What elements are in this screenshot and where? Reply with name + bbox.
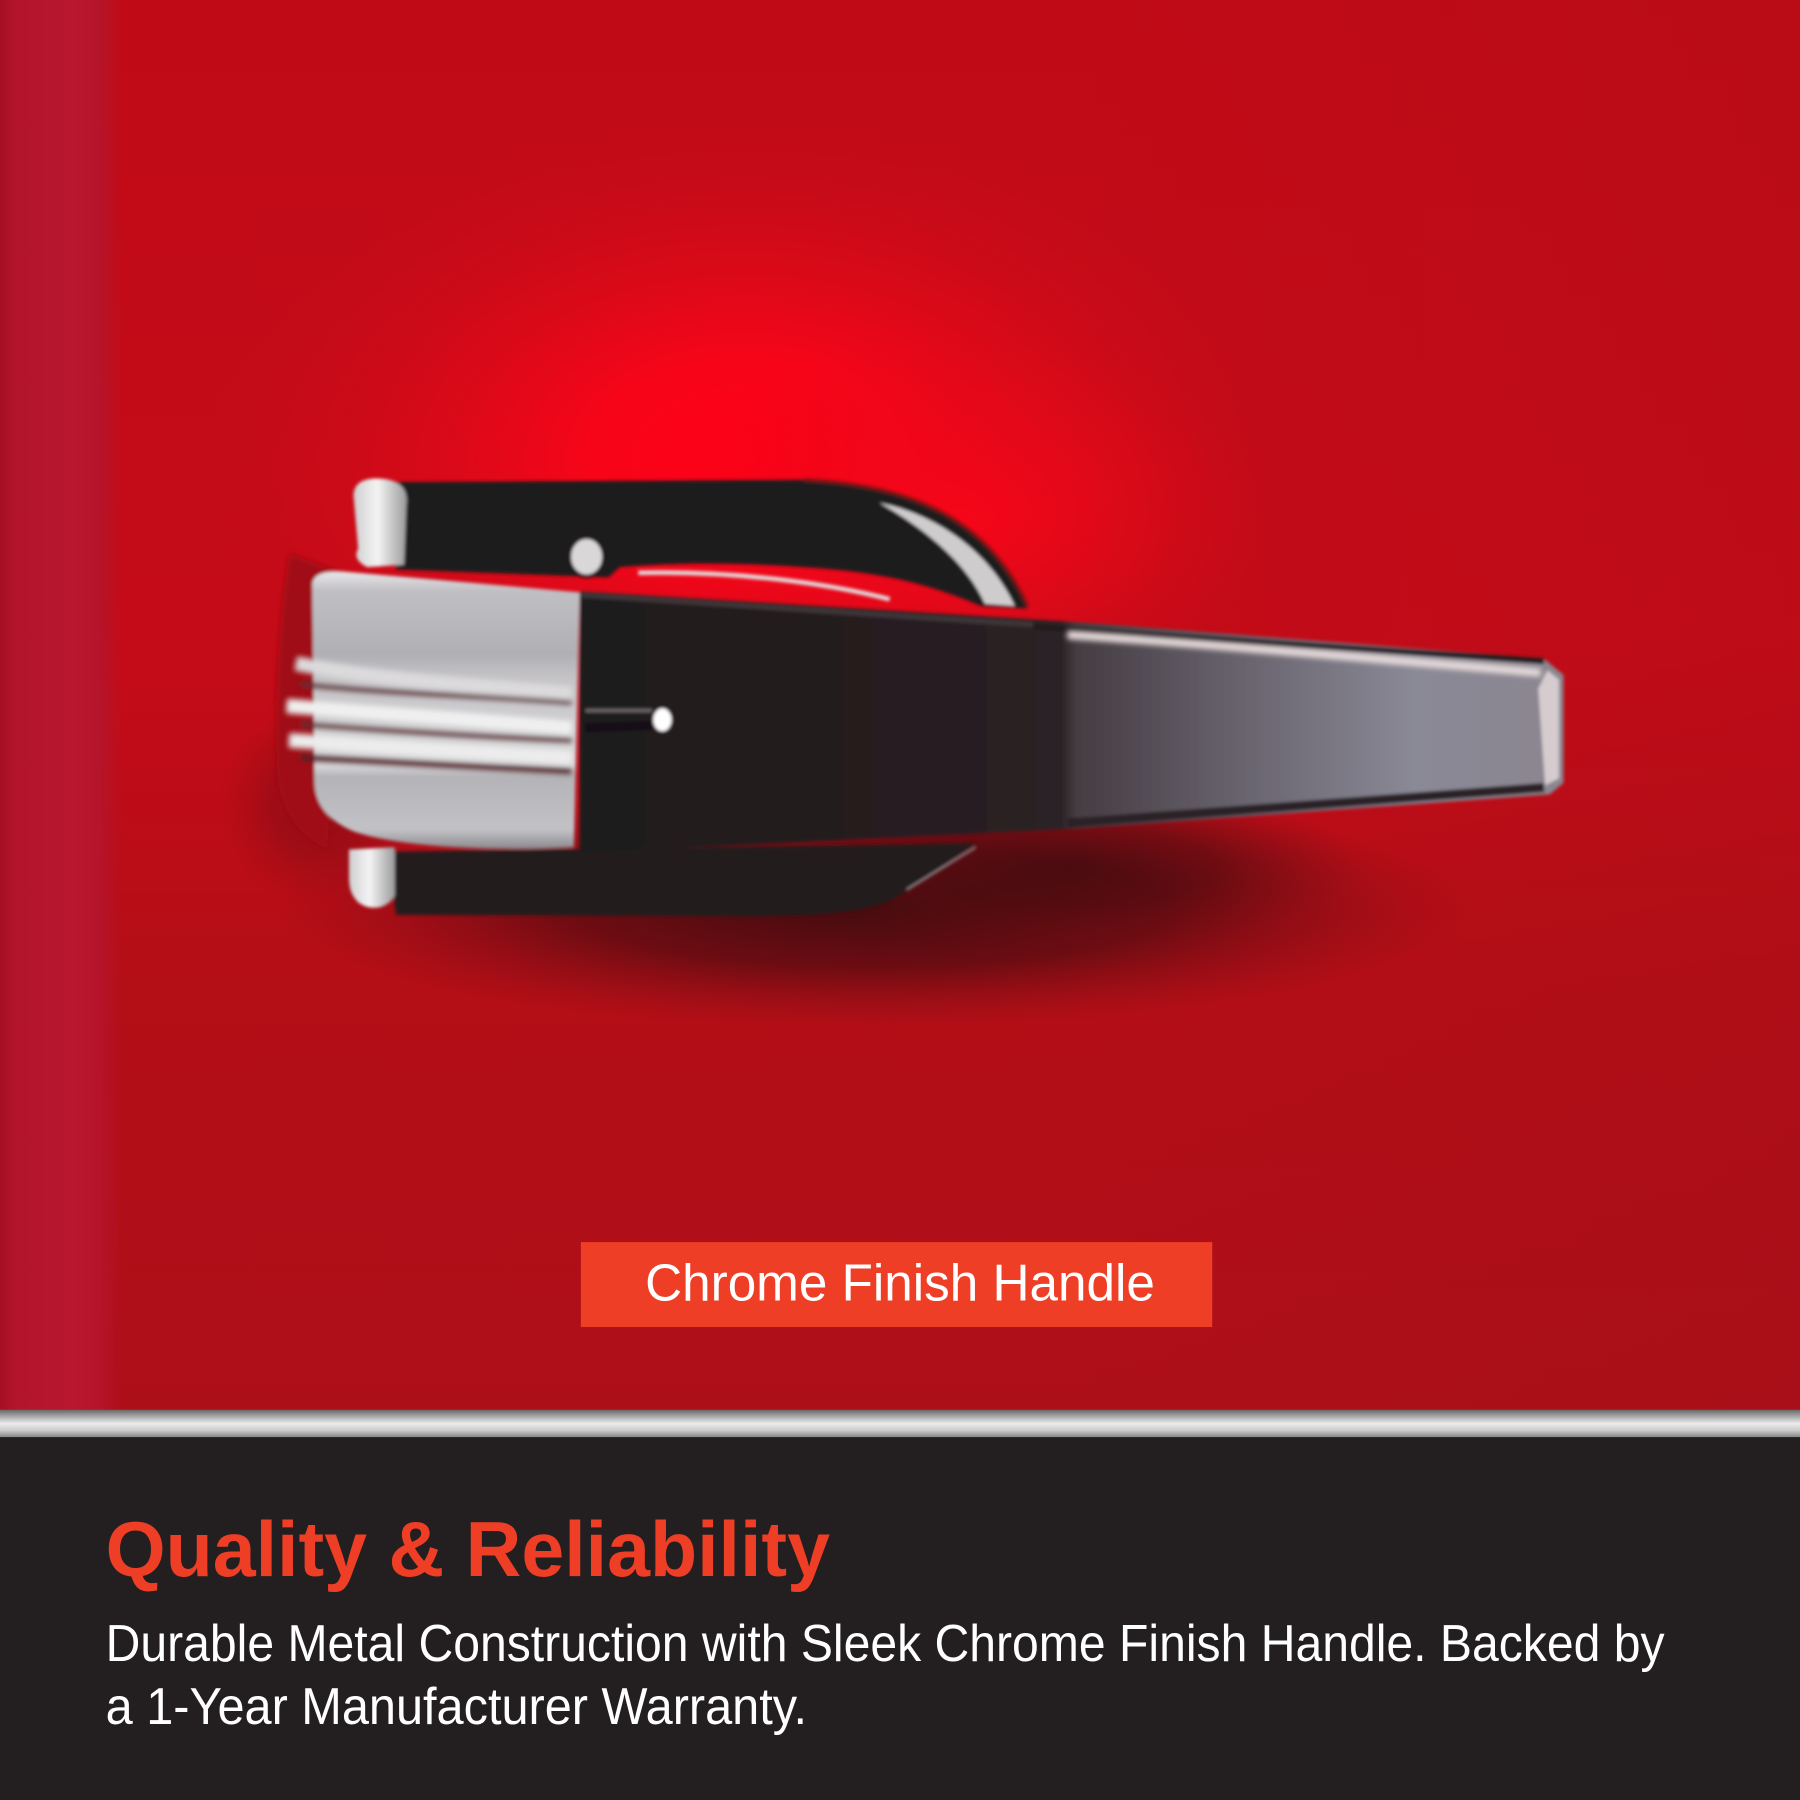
description: a 1-Year Manufacturer Warranty. <box>106 1677 807 1735</box>
lever highlights <box>580 595 1559 823</box>
dark text panel <box>0 1437 1800 1800</box>
lower bracket <box>388 844 976 916</box>
description: Durable Metal Construction with Sleek Chrome Finish Handle. Backed by <box>106 1614 1665 1672</box>
chrome cylinder <box>287 571 580 849</box>
callout label <box>581 1242 1212 1327</box>
main lever <box>580 591 1564 853</box>
screw <box>569 537 604 576</box>
upper chrome pin <box>354 479 407 567</box>
chrome door handle <box>276 479 1564 916</box>
handle drop shadow <box>218 700 1469 1027</box>
lower chrome pin <box>349 847 395 908</box>
red reflection ridges on chrome edge <box>276 553 344 849</box>
chrome divider <box>0 1410 1800 1437</box>
lever pivot dot <box>585 707 673 732</box>
heading: Quality & Reliability <box>106 1505 830 1593</box>
red fridge door background <box>0 0 1800 1412</box>
upper bracket <box>396 480 1027 608</box>
callout label: Chrome Finish Handle <box>645 1254 1155 1312</box>
